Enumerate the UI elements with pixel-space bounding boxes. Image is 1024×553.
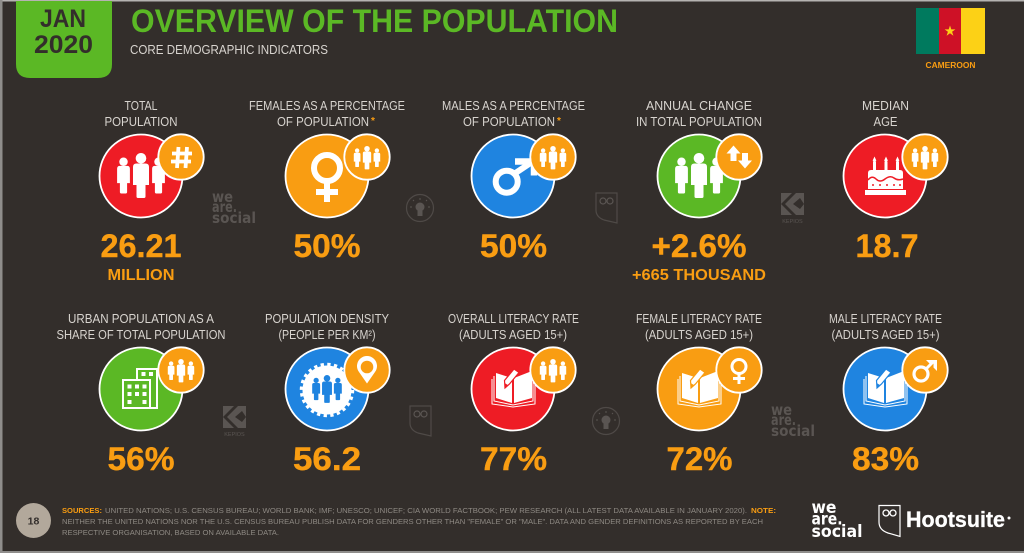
watermark: we are social lower xyxy=(771,401,815,440)
panel: urban population: SHARE OF TOTAL POPULATION xyxy=(56,328,226,342)
subtitle: CORE DEMOGRAPHIC INDICATORS xyxy=(130,43,328,57)
panel: annual change: IN TOTAL POPULATION xyxy=(636,115,762,129)
panel: population density xyxy=(265,312,390,477)
panel: female literacy: (ADULTS AGED 15+) xyxy=(645,328,753,342)
panel: female literacy: FEMALE LITERACY RATE xyxy=(636,312,762,326)
panel: urban population: URBAN POPULATION AS A xyxy=(68,312,215,326)
panel: males percentage: * xyxy=(557,116,561,127)
panel: males percentage: MALES AS A PERCENTAGE xyxy=(442,99,585,113)
panel: median age: 18.7 xyxy=(856,228,918,264)
panel: males percentage: OF POPULATION xyxy=(463,115,555,129)
panel: annual change: +665 THOUSAND xyxy=(632,267,766,284)
panel: overall literacy xyxy=(448,312,579,477)
panel: male literacy xyxy=(829,312,948,477)
panel: annual change: +2.6% xyxy=(652,228,746,264)
watermark: kepios lower: KEPIOS xyxy=(224,432,245,438)
panel: females percentage: FEMALES AS A PERCENTAGE xyxy=(249,99,405,113)
watermark: kepios upper: KEPIOS xyxy=(782,219,803,225)
panel: population density: 56.2 xyxy=(293,441,361,477)
panel: urban population: 56% xyxy=(108,441,174,477)
date tab: JAN xyxy=(40,5,86,33)
panel: males percentage xyxy=(442,99,585,264)
watermark: bulb upper xyxy=(406,194,434,222)
panel: total population xyxy=(100,99,204,284)
page number: 18 xyxy=(28,516,39,528)
panel: male literacy: (ADULTS AGED 15+) xyxy=(832,328,940,342)
panel: overall literacy: (ADULTS AGED 15+) xyxy=(459,328,567,342)
logo: we are social: we xyxy=(812,498,836,518)
watermark: we are social upper: social xyxy=(212,209,256,227)
flag: Cameroon: CAMEROON xyxy=(926,61,976,70)
page number xyxy=(16,503,51,538)
logo: Hootsuite: Hootsuite xyxy=(906,507,1005,532)
watermark: bulb lower xyxy=(592,408,620,434)
panel: median age: AGE xyxy=(874,115,898,129)
panel: female literacy xyxy=(636,312,762,477)
sources note: UNITED NATIONS; U.S. CENSUS BUREAU; WORLD BANK; IMF; UNESCO; UNICEF; CIA WORLD FACTBOOK; PEW RESEARCH (ALL LATEST DATA AVAILABLE IN JANUARY 2020). xyxy=(105,506,747,515)
watermark: we are social lower: we xyxy=(771,401,792,419)
panel: population density: POPULATION DENSITY xyxy=(265,312,390,326)
watermark: owl lower xyxy=(410,406,431,436)
panel: median age xyxy=(844,99,948,264)
logo: we are social xyxy=(812,498,862,542)
title: OVERVIEW OF THE POPULATION xyxy=(131,3,618,39)
watermark: we are social lower: are. xyxy=(771,411,796,429)
panel: population density: (PEOPLE PER KM²) xyxy=(278,328,376,342)
watermark: kepios lower xyxy=(223,406,246,438)
panel: annual change: ANNUAL CHANGE xyxy=(646,99,752,113)
panel: total population: POPULATION xyxy=(104,115,178,129)
watermark: we are social upper xyxy=(212,188,256,227)
panel: overall literacy: 77% xyxy=(480,441,547,477)
logo: we are social: are. xyxy=(812,510,842,530)
panel: females percentage: OF POPULATION xyxy=(277,115,369,129)
sources note: SOURCES: xyxy=(62,506,102,515)
panel: males percentage: 50% xyxy=(480,228,547,264)
panel: urban population xyxy=(56,312,226,477)
sources note: NOTE: xyxy=(751,506,776,515)
watermark: we are social upper: we xyxy=(212,188,233,206)
watermark: kepios upper xyxy=(781,193,804,225)
panel: female literacy: 72% xyxy=(666,441,732,477)
panel: male literacy: MALE LITERACY RATE xyxy=(829,312,942,326)
panel: females percentage: * xyxy=(371,116,375,127)
panel: total population: TOTAL xyxy=(124,99,158,113)
panel: overall literacy: OVERALL LITERACY RATE xyxy=(448,312,579,326)
sources note: NEITHER THE UNITED NATIONS NOR THE U.S. CENSUS BUREAU PUBLISH DATA FOR GENDERS OTHER THAN "FEMALE" OR "MALE". DATA AND GENDER DEFINITIONS AS REPORTED BY EACH xyxy=(62,517,763,526)
sources note xyxy=(62,506,776,537)
panel: total population: 26.21 xyxy=(100,228,182,264)
panel: females percentage xyxy=(249,99,405,264)
watermark: owl upper xyxy=(596,193,617,223)
logo: we are social: social xyxy=(812,522,862,542)
panel: annual change xyxy=(632,99,766,284)
logo: Hootsuite xyxy=(879,506,1010,536)
watermark: we are social upper: are. xyxy=(212,198,237,216)
date tab: 2020 xyxy=(34,31,93,59)
panel: females percentage: 50% xyxy=(294,228,360,264)
panel: median age: MEDIAN xyxy=(862,99,909,113)
panel: total population: MILLION xyxy=(108,267,174,284)
panel: male literacy: 83% xyxy=(852,441,919,477)
date tab xyxy=(16,1,112,78)
watermark: we are social lower: social xyxy=(771,422,815,440)
flag: Cameroon xyxy=(916,8,985,70)
sources note: RESPECTIVE ORGANISATION, BASED ON AVAILABLE DATA. xyxy=(62,528,279,537)
